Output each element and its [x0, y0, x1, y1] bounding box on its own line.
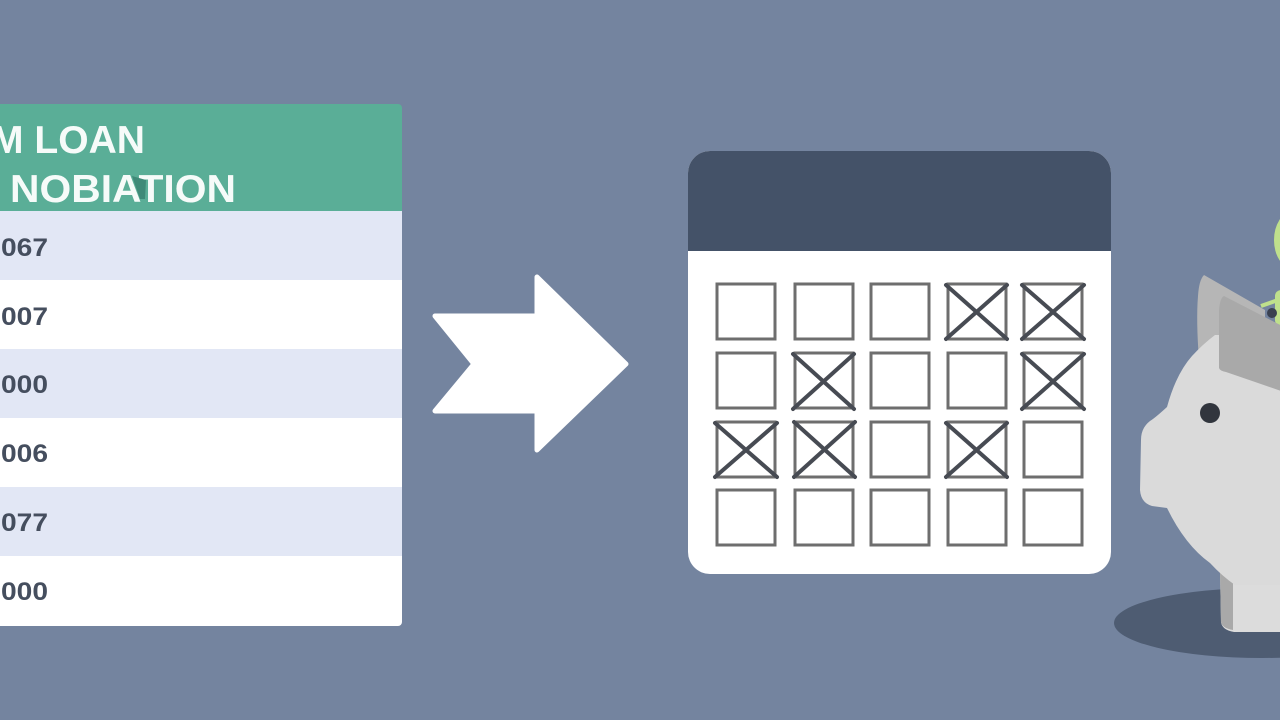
table header band: [0, 104, 402, 211]
calendar body: [688, 151, 1111, 574]
icon: piggy bank with plant: [1114, 212, 1280, 658]
row values: [1, 234, 48, 606]
heading: loan information: NOBIATION: [10, 168, 236, 211]
row values: 077: [1, 509, 48, 537]
panel: payment calendar: [688, 151, 1111, 574]
heading: loan information: [0, 119, 236, 211]
back ear: [1197, 275, 1265, 360]
leg shading: [1220, 572, 1233, 630]
pig body and snout: [1140, 335, 1280, 585]
panel: loan information table: [0, 104, 402, 626]
row values: 006: [1, 440, 48, 468]
ground shadow: [1114, 588, 1280, 658]
heading artifact wedge: [132, 176, 146, 199]
plant stem knot: [1267, 308, 1277, 318]
pig eye: [1200, 403, 1220, 423]
row values: 007: [1, 303, 48, 331]
row values: 000: [1, 578, 48, 606]
table rows: [0, 211, 402, 626]
row values: 067: [1, 234, 48, 262]
plant stem and leaves: [1261, 212, 1280, 326]
row values: 000: [1, 371, 48, 399]
calendar day boxes: [717, 284, 1082, 545]
pig legs: [1220, 570, 1280, 632]
front ear: [1219, 296, 1280, 394]
crossed-off days: [715, 285, 1084, 477]
arrow: table to calendar: [435, 277, 626, 450]
calendar header bar: [688, 151, 1111, 251]
